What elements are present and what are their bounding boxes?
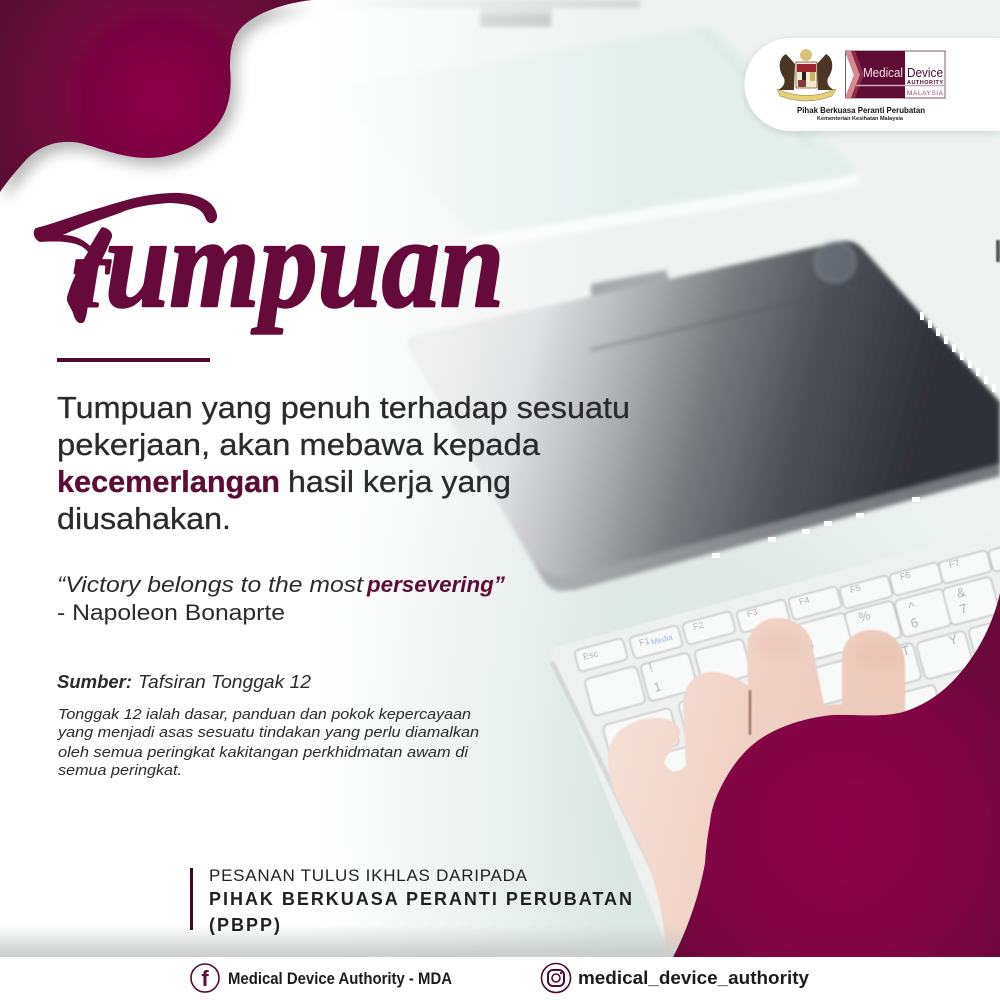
key legends: Media [650, 632, 674, 647]
key legends: F6 [899, 570, 912, 582]
logo pill: Pihak Berkuasa Peranti Perubatan [797, 105, 925, 115]
logo pill: Kementerian Kesihatan Malaysia [817, 116, 904, 122]
icon: facebook [191, 964, 219, 992]
key legends: Esc [582, 648, 599, 662]
source: semua peringkat. [58, 763, 182, 779]
key legends: Y [947, 631, 959, 648]
title underline [57, 358, 210, 362]
source: Tonggak 12 ialah dasar, panduan dan pokok kepercayaan [58, 707, 471, 723]
white fade over left side [0, 0, 620, 1000]
key legends: 6 [909, 615, 920, 631]
bottom grey fade [0, 925, 700, 957]
footer bar [0, 957, 1000, 1000]
message block: PESANAN TULUS IKHLAS DARIPADA [209, 866, 528, 885]
artefact dashes on tablet edge [712, 312, 996, 558]
facebook handle [191, 964, 452, 992]
message block [190, 866, 632, 935]
title: Tumpuan [70, 193, 504, 334]
instagram handle: medical_device_authority [578, 968, 809, 988]
quote: “Victory belongs to the most [57, 572, 364, 597]
dark tablet [408, 241, 1000, 591]
quote: persevering” [366, 572, 505, 597]
key legends: F5 [849, 583, 862, 595]
source: Tafsiran Tonggak 12 [138, 672, 311, 692]
key legends [582, 558, 969, 695]
monitor stand [320, 0, 640, 27]
top-left maroon blob [0, 0, 312, 192]
key legends: T [900, 642, 912, 659]
logo: Medical Device Authority: Device [907, 65, 943, 80]
source [57, 672, 479, 779]
main paragraph: kecemerlangan [57, 464, 280, 499]
key legends: 4 [805, 637, 816, 653]
blurred light tablet [337, 28, 860, 246]
logo: Medical Device Authority [845, 51, 945, 98]
key legends: 7 [958, 601, 969, 617]
quote: - Napoleon Bonaprte [57, 600, 285, 625]
icon: instagram [542, 964, 570, 992]
source: yang menjadi asas sesuatu tindakan yang perlu diamalkan [57, 725, 479, 741]
third row [602, 708, 680, 762]
number keys [584, 666, 646, 716]
key legends: F3 [746, 607, 759, 619]
key legends: F4 [798, 595, 811, 607]
main paragraph: diusahakan. [57, 501, 231, 536]
key legends: & [955, 584, 967, 601]
key legends: % [857, 607, 872, 625]
logo: Medical Device Authority: MALAYSIA [907, 90, 944, 97]
facebook handle: Medical Device Authority - MDA [228, 969, 452, 988]
keyboard [551, 528, 1000, 960]
bottom-right maroon blob [673, 593, 1000, 957]
logo: Medical Device Authority: Medical [863, 65, 903, 80]
message block: (PBPP) [209, 915, 280, 935]
main paragraph: Tumpuan yang penuh terhadap sesuatu [57, 390, 630, 425]
main paragraph [57, 390, 630, 536]
key legends: ! [647, 659, 654, 675]
main paragraph: hasil kerja yang [288, 464, 511, 499]
instagram handle [542, 964, 809, 992]
icon: facebook: f [201, 966, 209, 991]
message block: PIHAK BERKUASA PERANTI PERUBATAN [209, 889, 632, 909]
key legends: F2 [692, 620, 705, 632]
key legends: F7 [948, 558, 961, 570]
camera stray edge [996, 240, 1000, 262]
quote [57, 572, 505, 625]
function keys [574, 638, 628, 672]
source: oleh semua peringkat kakitangan perkhidmatan awam di [58, 745, 469, 761]
icon: malaysia coat of arms [777, 49, 836, 101]
hand [608, 618, 905, 955]
key legends: 1 [652, 679, 663, 695]
main paragraph: pekerjaan, akan mebawa kepada [57, 427, 541, 462]
logo pill [744, 38, 1000, 131]
key legends: ^ [907, 599, 918, 615]
source: Sumber: [57, 672, 132, 692]
fourth row [656, 742, 714, 792]
title swash [34, 193, 217, 323]
logo: Medical Device Authority: AUTHORITY [907, 80, 943, 86]
key legends: F1 [638, 636, 651, 648]
